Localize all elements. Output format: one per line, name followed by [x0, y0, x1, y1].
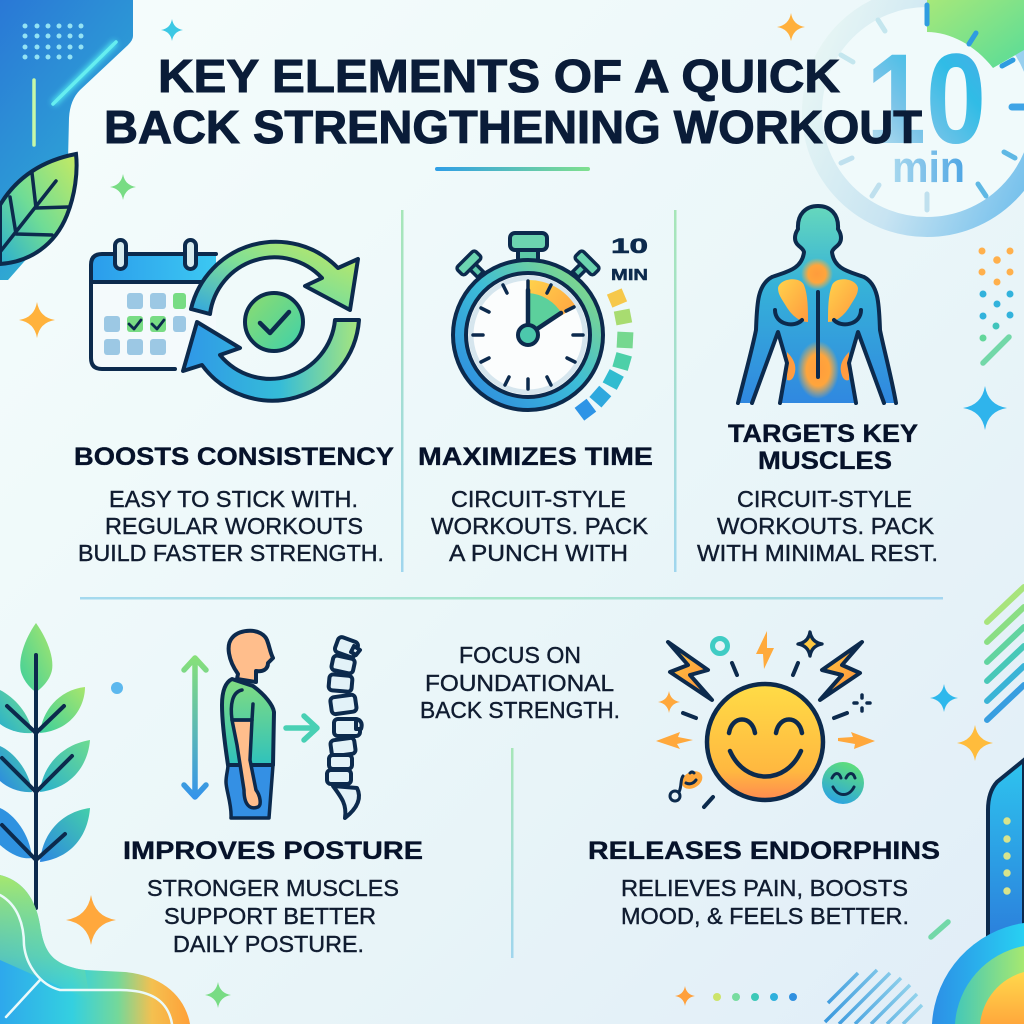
text: boosts consistency body: EASY TO STICK WITH.: [109, 486, 358, 512]
bottom-left corner shape: [0, 875, 190, 1024]
text: improves posture body: STRONGER MUSCLES: [147, 875, 399, 901]
text: boosts consistency body: [78, 486, 384, 566]
panel: maximizes time: [418, 233, 653, 566]
title: [104, 50, 922, 153]
text: focus on foundational back strength: FOUNDATIONAL: [425, 670, 614, 696]
text: releases endorphins body: MOOD, & FEELS BETTER.: [621, 903, 909, 929]
icon: stopwatch with 10 min gauge: 10: [611, 235, 648, 258]
text: focus on foundational back strength: [420, 642, 620, 723]
top-right clock watermark: 10: [866, 28, 986, 171]
heading: releases endorphins: RELEASES ENDORPHINS: [588, 837, 940, 865]
icon: corner leaf: [0, 154, 77, 264]
bottom-right corner shape: [932, 760, 1024, 1024]
decorative plant: [0, 623, 90, 908]
text: releases endorphins body: [621, 875, 909, 929]
hatched circle: [825, 970, 922, 1024]
icon: calendar with circular arrows: [91, 240, 359, 401]
panel: boosts consistency: [74, 240, 394, 566]
text: boosts consistency body: REGULAR WORKOUTS: [105, 513, 363, 539]
heading: improves posture: IMPROVES POSTURE: [123, 837, 423, 865]
top-right clock watermark: [812, 0, 1024, 227]
heading: targets key muscles: [728, 420, 918, 475]
text: maximizes time body: [431, 486, 649, 566]
top-right clock watermark: min: [892, 143, 965, 192]
right-side diagonal stripes: [987, 587, 1024, 720]
text: maximizes time body: WORKOUTS. PACK: [431, 513, 649, 539]
panel: improves posture: [123, 631, 423, 957]
text: releases endorphins body: RELIEVES PAIN, BOOSTS: [621, 875, 908, 901]
icon: stopwatch with 10 min gauge: MIN: [611, 267, 648, 284]
heading: maximizes time: MAXIMIZES TIME: [418, 443, 653, 471]
icon: standing posture and spine: [184, 631, 362, 818]
text: focus on foundational back strength: FOCUS ON: [459, 642, 581, 668]
text: targets key muscles body: CIRCUIT-STYLE: [737, 486, 912, 512]
bottom progress dots: [713, 993, 797, 1001]
text: targets key muscles body: WORKOUTS. PACK: [717, 513, 935, 539]
icon: smiling face with energy bursts: [656, 631, 875, 807]
heading: targets key muscles: MUSCLES: [758, 447, 892, 475]
text: targets key muscles body: [697, 486, 938, 566]
heading: boosts consistency: BOOSTS CONSISTENCY: [74, 443, 394, 471]
text: improves posture body: DAILY POSTURE.: [173, 931, 364, 957]
text: maximizes time body: CIRCUIT-STYLE: [451, 486, 626, 512]
text: boosts consistency body: BUILD FASTER STRENGTH.: [78, 540, 384, 566]
title: KEY ELEMENTS OF A QUICK: [158, 50, 840, 102]
right-side dot cluster: [978, 248, 1014, 363]
panel: targets key muscles: [697, 206, 938, 566]
panel: releases endorphins: [588, 631, 940, 929]
text: improves posture body: [147, 875, 399, 957]
top-left corner shape: [0, 0, 133, 280]
heading: targets key muscles: TARGETS KEY: [728, 420, 918, 448]
text: maximizes time body: A PUNCH WITH: [449, 540, 628, 566]
text: focus on foundational back strength: BACK STRENGTH.: [420, 697, 620, 723]
title: BACK STRENGTHENING WORKOUT: [104, 101, 922, 153]
icon: back muscles figure: [738, 206, 896, 403]
text: targets key muscles body: WITH MINIMAL REST.: [697, 540, 938, 566]
icon: stopwatch with 10 min gauge: [453, 233, 648, 421]
text: improves posture body: SUPPORT BETTER: [164, 903, 376, 929]
